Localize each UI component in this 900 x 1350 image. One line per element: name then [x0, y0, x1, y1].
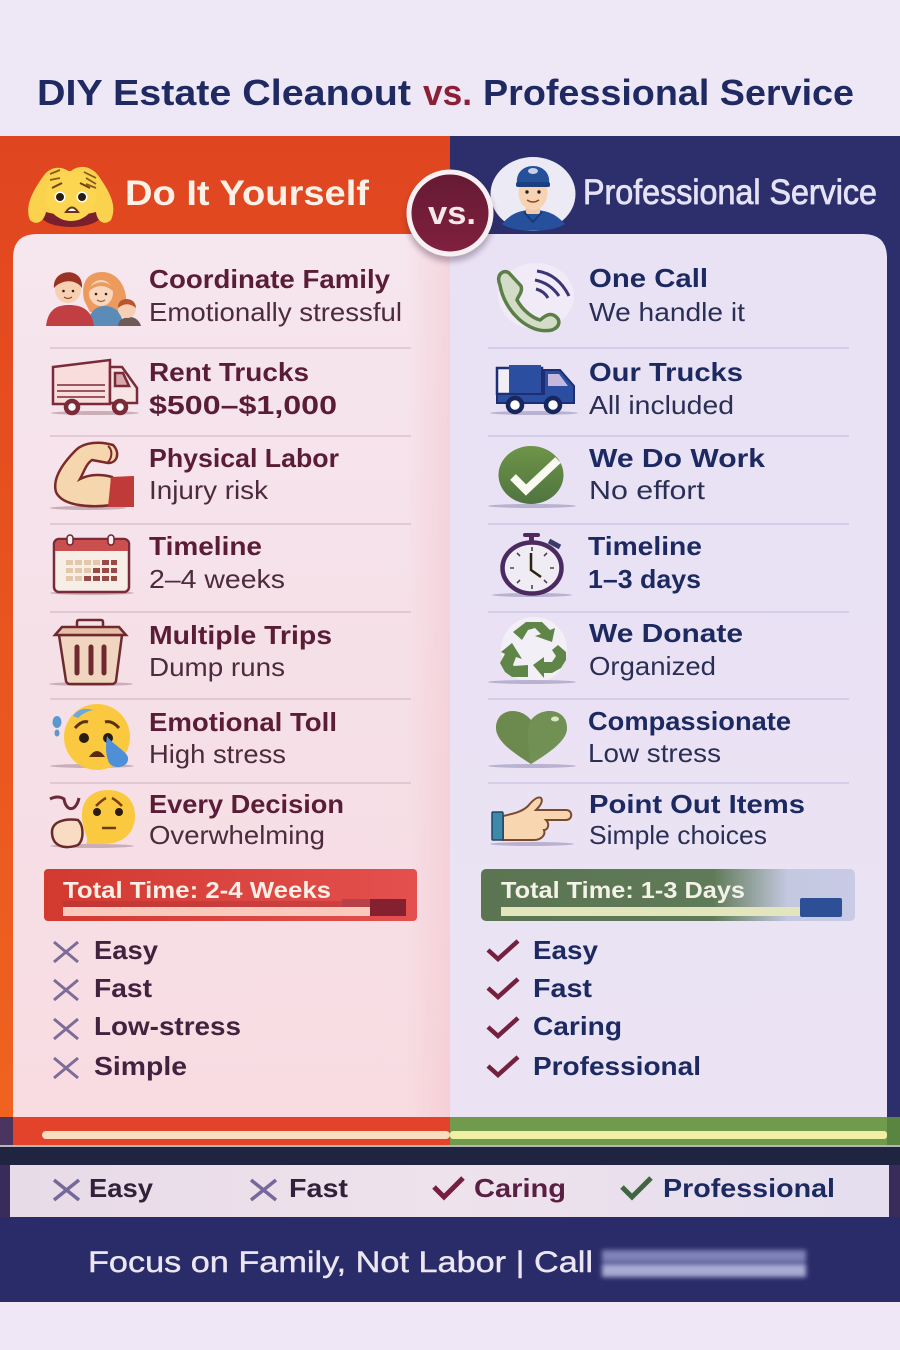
icon: pointing hand	[490, 797, 574, 846]
panel: comparison card	[13, 234, 887, 1117]
icon: service worker	[490, 157, 576, 231]
footer banner: Focus on Family, Not Labor | Call	[88, 1246, 593, 1279]
icon: stopwatch	[492, 533, 572, 597]
row: every decision	[50, 789, 344, 850]
list: DIY negatives: Easy	[94, 935, 159, 965]
row: compassionate: Compassionate	[588, 706, 791, 736]
row: point out items	[490, 789, 805, 850]
footer banner	[0, 1217, 900, 1302]
row: emotional toll: Emotional Toll	[149, 707, 337, 737]
row: coordinate family	[46, 264, 402, 327]
row: our trucks: All included	[589, 390, 734, 420]
legend strip: Easy	[89, 1173, 154, 1203]
row: timeline DIY	[50, 531, 285, 595]
callout: total time DIY	[44, 869, 417, 921]
row: multiple trips: Dump runs	[149, 652, 285, 682]
row: emotional toll: High stress	[149, 739, 286, 769]
icon: heart	[488, 711, 576, 768]
legend strip: Professional	[663, 1173, 835, 1203]
title: DIY Estate Cleanout	[37, 72, 411, 113]
row: physical labor	[50, 443, 339, 510]
list: DIY negatives: Fast	[94, 973, 152, 1003]
row: multiple trips	[49, 620, 332, 686]
panel: professional header band	[450, 136, 900, 1118]
badge: vs.	[406, 172, 494, 262]
row: every decision: Every Decision	[149, 789, 344, 819]
column: professional rows	[488, 263, 805, 850]
icon: stressed face	[28, 167, 113, 227]
row: emotional toll	[50, 704, 337, 770]
row: timeline pro: 1–3 days	[588, 564, 701, 594]
row: one call	[498, 263, 746, 331]
row: point out items: Simple choices	[589, 820, 767, 850]
row: physical labor: Physical Labor	[149, 443, 339, 473]
list: professional positives: Fast	[533, 973, 592, 1003]
row: we do work: No effort	[589, 475, 706, 505]
icon: trash bin	[49, 620, 133, 686]
legend strip	[0, 1165, 900, 1217]
row: one call: We handle it	[589, 297, 746, 327]
row: rent trucks	[51, 357, 337, 420]
icon: rental truck	[51, 360, 139, 415]
row: every decision: Overwhelming	[149, 820, 325, 850]
heading: do it yourself: Do It Yourself	[125, 174, 369, 213]
row: our trucks: Our Trucks	[589, 357, 743, 387]
icon: flexed arm	[50, 443, 134, 510]
list: professional positives: Caring	[533, 1011, 622, 1041]
row: multiple trips: Multiple Trips	[149, 620, 332, 650]
list: professional positives	[488, 935, 701, 1081]
callout: total time pro	[481, 869, 855, 921]
row: point out items: Point Out Items	[589, 789, 805, 819]
callout: total time DIY: Total Time: 2-4 Weeks	[63, 877, 331, 903]
row: timeline DIY: Timeline	[149, 531, 262, 561]
heading: professional service: Professional Service	[583, 173, 877, 212]
row: physical labor: Injury risk	[149, 475, 269, 505]
row: timeline pro	[492, 531, 702, 597]
list: DIY negatives: Simple	[94, 1051, 187, 1081]
icon: recycle	[488, 617, 576, 684]
panel: DIY header band	[0, 136, 450, 1118]
icon: company truck	[490, 365, 578, 415]
comparison bar	[0, 1117, 900, 1146]
icon: calendar	[50, 535, 134, 595]
row: compassionate	[488, 706, 791, 768]
legend strip: Caring	[474, 1173, 566, 1203]
legend strip: Fast	[289, 1173, 348, 1203]
column: DIY rows	[46, 264, 402, 850]
row: compassionate: Low stress	[588, 738, 721, 768]
row: timeline pro: Timeline	[588, 531, 702, 561]
row: timeline DIY: 2–4 weeks	[149, 564, 285, 594]
title: vs.	[423, 72, 472, 113]
title: Professional Service	[483, 72, 854, 113]
row: we donate: Organized	[589, 651, 716, 681]
row: one call: One Call	[589, 263, 708, 293]
icon: family	[46, 272, 141, 326]
icon: overwhelmed face	[50, 790, 135, 848]
icon: crying face	[50, 704, 134, 770]
dark band	[0, 1145, 900, 1165]
icon: phone	[498, 263, 574, 331]
badge: vs.: vs.	[428, 195, 476, 231]
callout: total time pro: Total Time: 1-3 Days	[501, 877, 745, 903]
list: professional positives: Easy	[533, 935, 599, 965]
list: DIY negatives	[54, 935, 241, 1081]
title	[37, 72, 854, 113]
row: coordinate family: Coordinate Family	[149, 264, 391, 294]
list: professional positives: Professional	[533, 1051, 701, 1081]
list: DIY negatives: Low-stress	[94, 1011, 241, 1041]
row: rent trucks: $500–$1,000	[149, 390, 337, 420]
icon: green check	[488, 446, 576, 508]
row: rent trucks: Rent Trucks	[149, 357, 309, 387]
row: coordinate family: Emotionally stressful	[149, 297, 402, 327]
row: our trucks	[490, 357, 743, 420]
row: we do work	[488, 443, 766, 508]
row: we do work: We Do Work	[589, 443, 766, 473]
row: we donate: We Donate	[589, 618, 743, 648]
row: we donate	[488, 617, 743, 684]
